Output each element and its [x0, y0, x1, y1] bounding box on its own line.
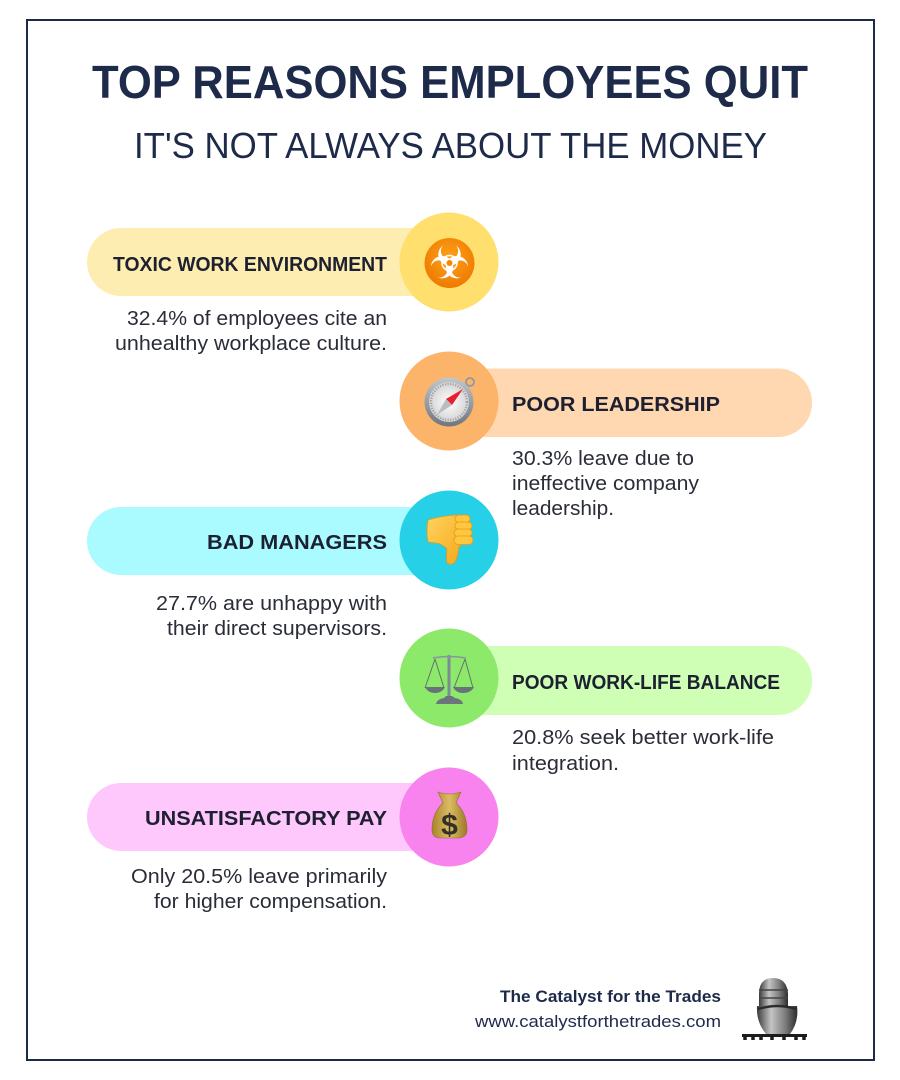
description: integration.	[512, 753, 619, 775]
description: their direct supervisors.	[167, 618, 387, 640]
description: 27.7% are unhappy with	[156, 593, 387, 615]
label pill	[452, 646, 812, 715]
icon: biohazard	[424, 238, 474, 288]
description: Only 20.5% leave primarily	[131, 866, 387, 888]
heading: POOR WORK-LIFE BALANCE	[512, 672, 780, 694]
panel: toxic work environment	[87, 212, 498, 355]
label pill	[87, 783, 447, 851]
description	[512, 448, 699, 520]
footer: brand text	[474, 987, 721, 1031]
heading: UNSATISFACTORY PAY	[145, 808, 388, 830]
description: unhealthy workplace culture.	[115, 333, 387, 355]
footer: brand text: The Catalyst for the Trades	[500, 987, 721, 1006]
label pill	[87, 228, 447, 296]
icon: compass	[424, 378, 474, 426]
description	[156, 593, 387, 640]
icon circle	[400, 768, 498, 866]
icon circle	[400, 212, 498, 312]
description: ineffective company	[512, 473, 699, 495]
icon: microphone logo	[742, 978, 807, 1040]
icon: balance scales	[425, 655, 474, 704]
label pill	[87, 507, 447, 575]
description	[131, 866, 387, 913]
description	[115, 308, 387, 355]
description: for higher compensation.	[154, 891, 387, 913]
description: leadership.	[512, 498, 614, 520]
icon: money bag: $	[441, 809, 458, 842]
icon: money bag	[432, 792, 467, 842]
heading: POOR LEADERSHIP	[512, 394, 720, 416]
panel: poor work-life balance	[400, 628, 812, 775]
panel: unsatisfactory pay	[87, 768, 498, 913]
footer: brand text: www.catalystforthetrades.com	[474, 1012, 721, 1031]
panel: bad managers	[87, 490, 498, 640]
heading: BAD MANAGERS	[207, 532, 387, 554]
subtitle: IT'S NOT ALWAYS ABOUT THE MONEY	[134, 125, 767, 166]
icon: thumbs down	[427, 515, 473, 564]
panel: poor leadership	[400, 352, 812, 520]
title: TOP REASONS EMPLOYEES QUIT	[92, 56, 808, 108]
description: 30.3% leave due to	[512, 448, 694, 470]
description: 32.4% of employees cite an	[127, 308, 387, 330]
description	[512, 727, 774, 775]
icon circle	[400, 352, 498, 450]
icon circle	[400, 490, 498, 590]
label pill	[452, 368, 812, 437]
description: 20.8% seek better work-life	[512, 727, 774, 749]
icon circle	[400, 628, 498, 728]
heading: TOXIC WORK ENVIRONMENT	[113, 254, 387, 276]
